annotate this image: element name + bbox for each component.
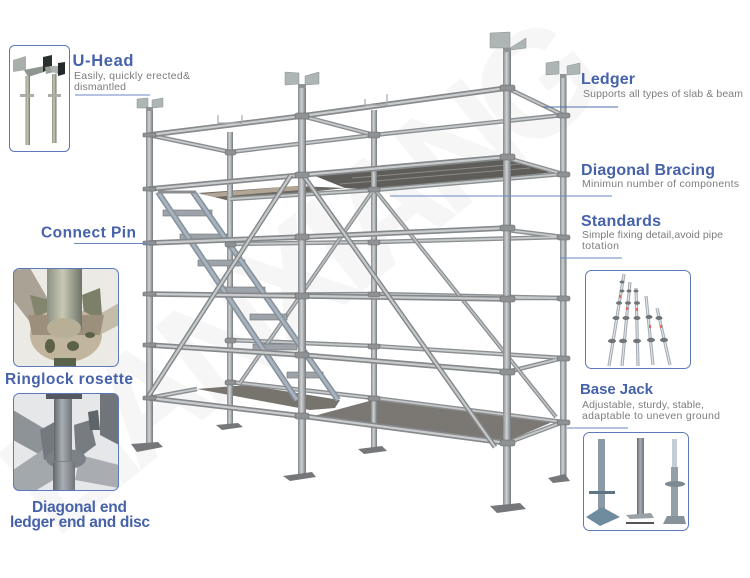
heading: Diagonal end: Diagonal end [32, 499, 127, 516]
rosette joints [143, 85, 570, 446]
staircase [158, 192, 338, 400]
panel: Diagonal end photo [13, 393, 119, 491]
leader: Ledger [543, 106, 618, 108]
upper deck [198, 157, 556, 201]
heading: Standards: Standards [581, 213, 661, 230]
icon: five standards [608, 274, 670, 366]
heading: Diagonal Bracing: Diagonal Bracing [581, 162, 715, 179]
text: Standards description: totation [582, 240, 619, 252]
text: Base Jack description: Adjustable, sturdy, stable, [582, 399, 704, 411]
panel: Base Jack photo [584, 432, 688, 530]
text: Ledger description: Supports all types of slab & beam [583, 88, 743, 100]
icon: U-head jacks [13, 55, 65, 145]
base plates [131, 423, 570, 513]
front ledgers [149, 88, 507, 443]
leader: Connect Pin [74, 242, 149, 244]
heading: Connect Pin: Connect Pin [41, 224, 136, 242]
text: U-Head description: Easily, quickly erected& [74, 70, 190, 82]
heading: Base Jack: Base Jack [580, 381, 654, 398]
back standards [227, 76, 566, 479]
lower deck [197, 385, 557, 443]
text: Base Jack description: adaptable to uneven ground [582, 410, 720, 422]
heading: Ledger: Ledger [581, 71, 635, 88]
panel: U-Head [10, 46, 70, 152]
text: U-Head description: dismantled [74, 81, 126, 93]
heading: Ringlock rosette: Ringlock rosette [5, 371, 133, 388]
front diagonal braces [148, 175, 495, 447]
back ledgers [149, 88, 563, 443]
scaffold structure [131, 32, 580, 513]
leader: Base Jack [567, 427, 628, 429]
icon: three base jacks [586, 438, 686, 526]
leader: Standards [560, 257, 622, 259]
text: Diagonal Bracing description: Minimun number of components [582, 178, 739, 190]
leader: U-Head [75, 94, 150, 96]
heading: U-Head: U-Head [72, 52, 134, 70]
heading: ledger end and disc: ledger end and disc [10, 514, 150, 531]
leader: Diagonal Bracing [390, 195, 612, 197]
u-heads on scaffold [137, 32, 580, 123]
panel: Ringlock rosette photo [13, 268, 119, 368]
text: Standards description: Simple fixing detail,avoid pipe [582, 229, 723, 241]
back diagonal braces [240, 191, 556, 417]
front standards [146, 50, 511, 508]
panel: Standards photo [586, 270, 690, 368]
